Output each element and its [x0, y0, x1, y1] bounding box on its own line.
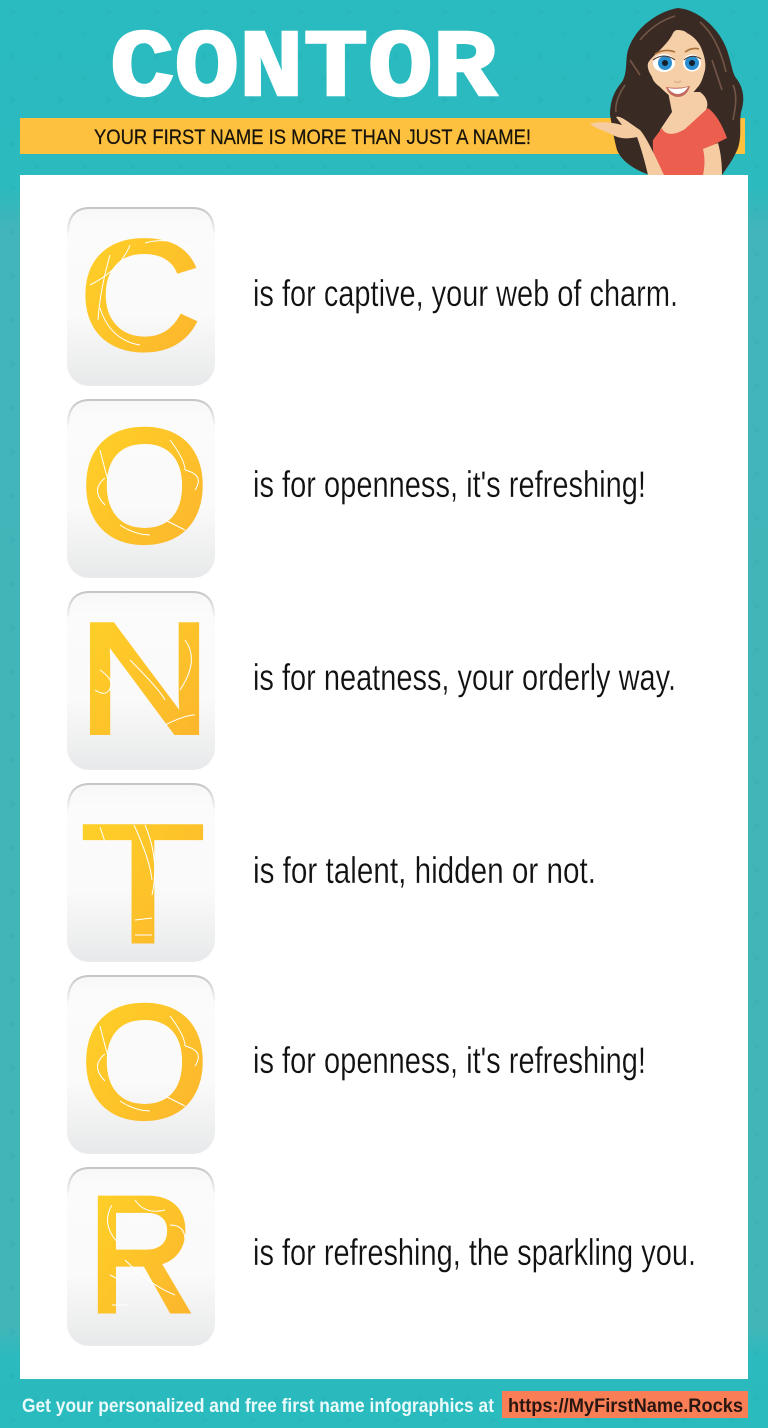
footer call to action: Get your personalized and free first name infographics at	[22, 1396, 495, 1417]
shirt	[653, 108, 727, 175]
card 6: letter R: R	[88, 1163, 194, 1346]
white content panel	[20, 175, 748, 1379]
subtitle banner	[20, 118, 745, 154]
text line 4: is for talent, hidden or not.	[253, 850, 596, 891]
eyebrows	[655, 48, 699, 54]
card 4: letter T: T	[80, 789, 206, 978]
text line 2: is for openness, it's refreshing!	[253, 464, 646, 505]
card 4: letter T	[67, 783, 215, 978]
eyes	[653, 54, 675, 72]
title: CONTOR	[110, 15, 497, 124]
text line 5: is for openness, it's refreshing!	[253, 1040, 646, 1081]
card 5: letter O: O	[81, 972, 208, 1151]
card 1: letter C: C	[79, 209, 201, 383]
footer link badge: https://MyFirstName.Rocks	[508, 1396, 743, 1417]
nose	[674, 81, 681, 82]
card 3: letter N: N	[77, 591, 212, 767]
hair	[610, 8, 743, 175]
subtitle banner: YOUR FIRST NAME IS MORE THAN JUST A NAME!	[94, 126, 531, 149]
left arm and hand	[590, 117, 664, 175]
card 2: letter O: O	[81, 396, 208, 575]
face	[648, 30, 705, 99]
mouth	[666, 86, 690, 97]
right arm	[703, 143, 722, 175]
illustration: woman presenting	[590, 8, 743, 175]
neck and chest	[660, 92, 707, 136]
